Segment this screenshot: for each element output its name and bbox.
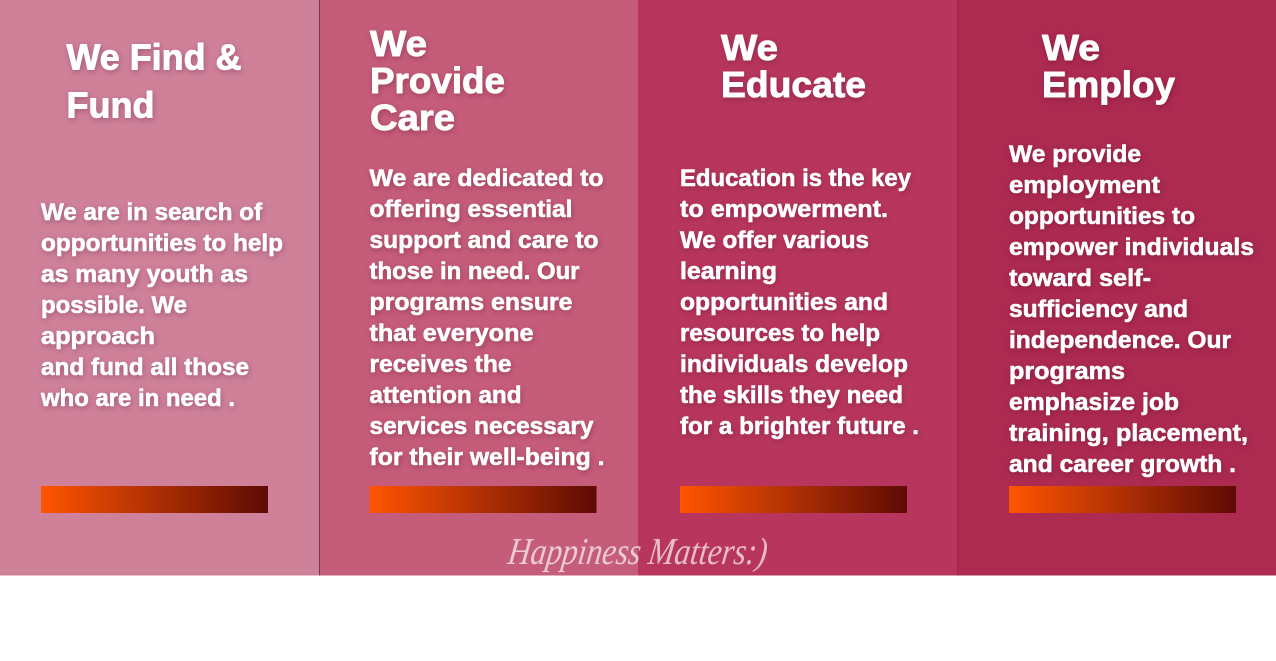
- text block: employ description: employment: [1009, 172, 1160, 199]
- heading: we provide care: [370, 23, 505, 138]
- text block: educate description: to empowerment.: [680, 196, 888, 223]
- text block: find and fund description: who are in need .: [40, 385, 235, 412]
- text block: provide care description: programs ensure: [370, 289, 572, 316]
- heading: we employ: [1042, 27, 1175, 105]
- text block: provide care description: [370, 165, 604, 471]
- text block: provide care description: receives the: [370, 351, 512, 378]
- text block: educate description: [680, 165, 919, 440]
- text block: employ description: programs: [1009, 358, 1125, 385]
- heading: we find and fund: [66, 36, 242, 126]
- text block: employ description: opportunities to: [1009, 203, 1195, 230]
- tagline: Happiness Matters:): [505, 531, 770, 573]
- text block: provide care description: support and care to: [370, 227, 598, 254]
- heading: we find and fund: Fund: [66, 84, 154, 126]
- text block: employ description: We provide: [1009, 141, 1141, 168]
- heading: we provide care: Care: [370, 97, 455, 138]
- heading: we employ: We: [1042, 27, 1100, 68]
- text block: employ description: and career growth .: [1009, 451, 1236, 478]
- text block: employ description: independence. Our: [1009, 327, 1231, 354]
- text block: provide care description: those in need. Our: [370, 258, 580, 285]
- text block: employ description: [1009, 141, 1254, 478]
- text block: provide care description: that everyone: [370, 320, 534, 347]
- text block: provide care description: offering essential: [370, 196, 572, 223]
- heading: we educate: We: [721, 27, 778, 68]
- text block: find and fund description: We are in search of: [41, 199, 263, 226]
- text block: educate description: We offer various: [680, 227, 869, 254]
- text block: employ description: empower individuals: [1009, 234, 1254, 261]
- text block: find and fund description: approach: [41, 323, 155, 350]
- text block: find and fund description: as many youth as: [41, 261, 248, 288]
- panel: we educate: [638, 0, 957, 576]
- gradient bar: panel 2: [370, 486, 596, 513]
- text block: employ description: toward self-: [1009, 265, 1151, 292]
- panel: we employ: [957, 0, 1276, 576]
- gradient bar: panel 1: [41, 486, 268, 513]
- text block: find and fund description: opportunities to help: [41, 230, 283, 257]
- heading: we educate: [721, 27, 866, 105]
- text block: educate description: the skills they need: [680, 382, 903, 409]
- gradient bar: panel 4: [1009, 486, 1236, 513]
- heading: we provide care: We: [370, 23, 427, 64]
- text block: employ description: training, placement,: [1009, 420, 1248, 447]
- heading: we find and fund: We Find &: [66, 36, 242, 78]
- panel: we provide care: [320, 0, 638, 576]
- text block: educate description: opportunities and: [680, 289, 888, 316]
- heading: we employ: Employ: [1042, 64, 1175, 105]
- text block: educate description: resources to help: [680, 320, 880, 347]
- heading: we educate: Educate: [721, 64, 866, 105]
- text block: educate description: individuals develop: [680, 351, 908, 378]
- text block: educate description: for a brighter future .: [680, 413, 919, 440]
- text block: find and fund description: and fund all those: [41, 354, 249, 381]
- text block: find and fund description: possible. We: [41, 292, 187, 319]
- text block: educate description: learning: [680, 258, 777, 285]
- heading: we provide care: Provide: [370, 60, 505, 101]
- text block: provide care description: We are dedicated to: [370, 165, 604, 192]
- text block: provide care description: attention and: [370, 382, 522, 409]
- panel: we find and fund: [0, 0, 320, 576]
- text block: educate description: Education is the key: [680, 165, 912, 192]
- text block: provide care description: for their well-being .: [370, 444, 604, 471]
- text block: find and fund description: [40, 199, 283, 412]
- gradient bar: panel 3: [680, 486, 907, 513]
- text block: provide care description: services necessary: [370, 413, 594, 440]
- text block: employ description: sufficiency and: [1009, 296, 1188, 323]
- text block: employ description: emphasize job: [1009, 389, 1179, 416]
